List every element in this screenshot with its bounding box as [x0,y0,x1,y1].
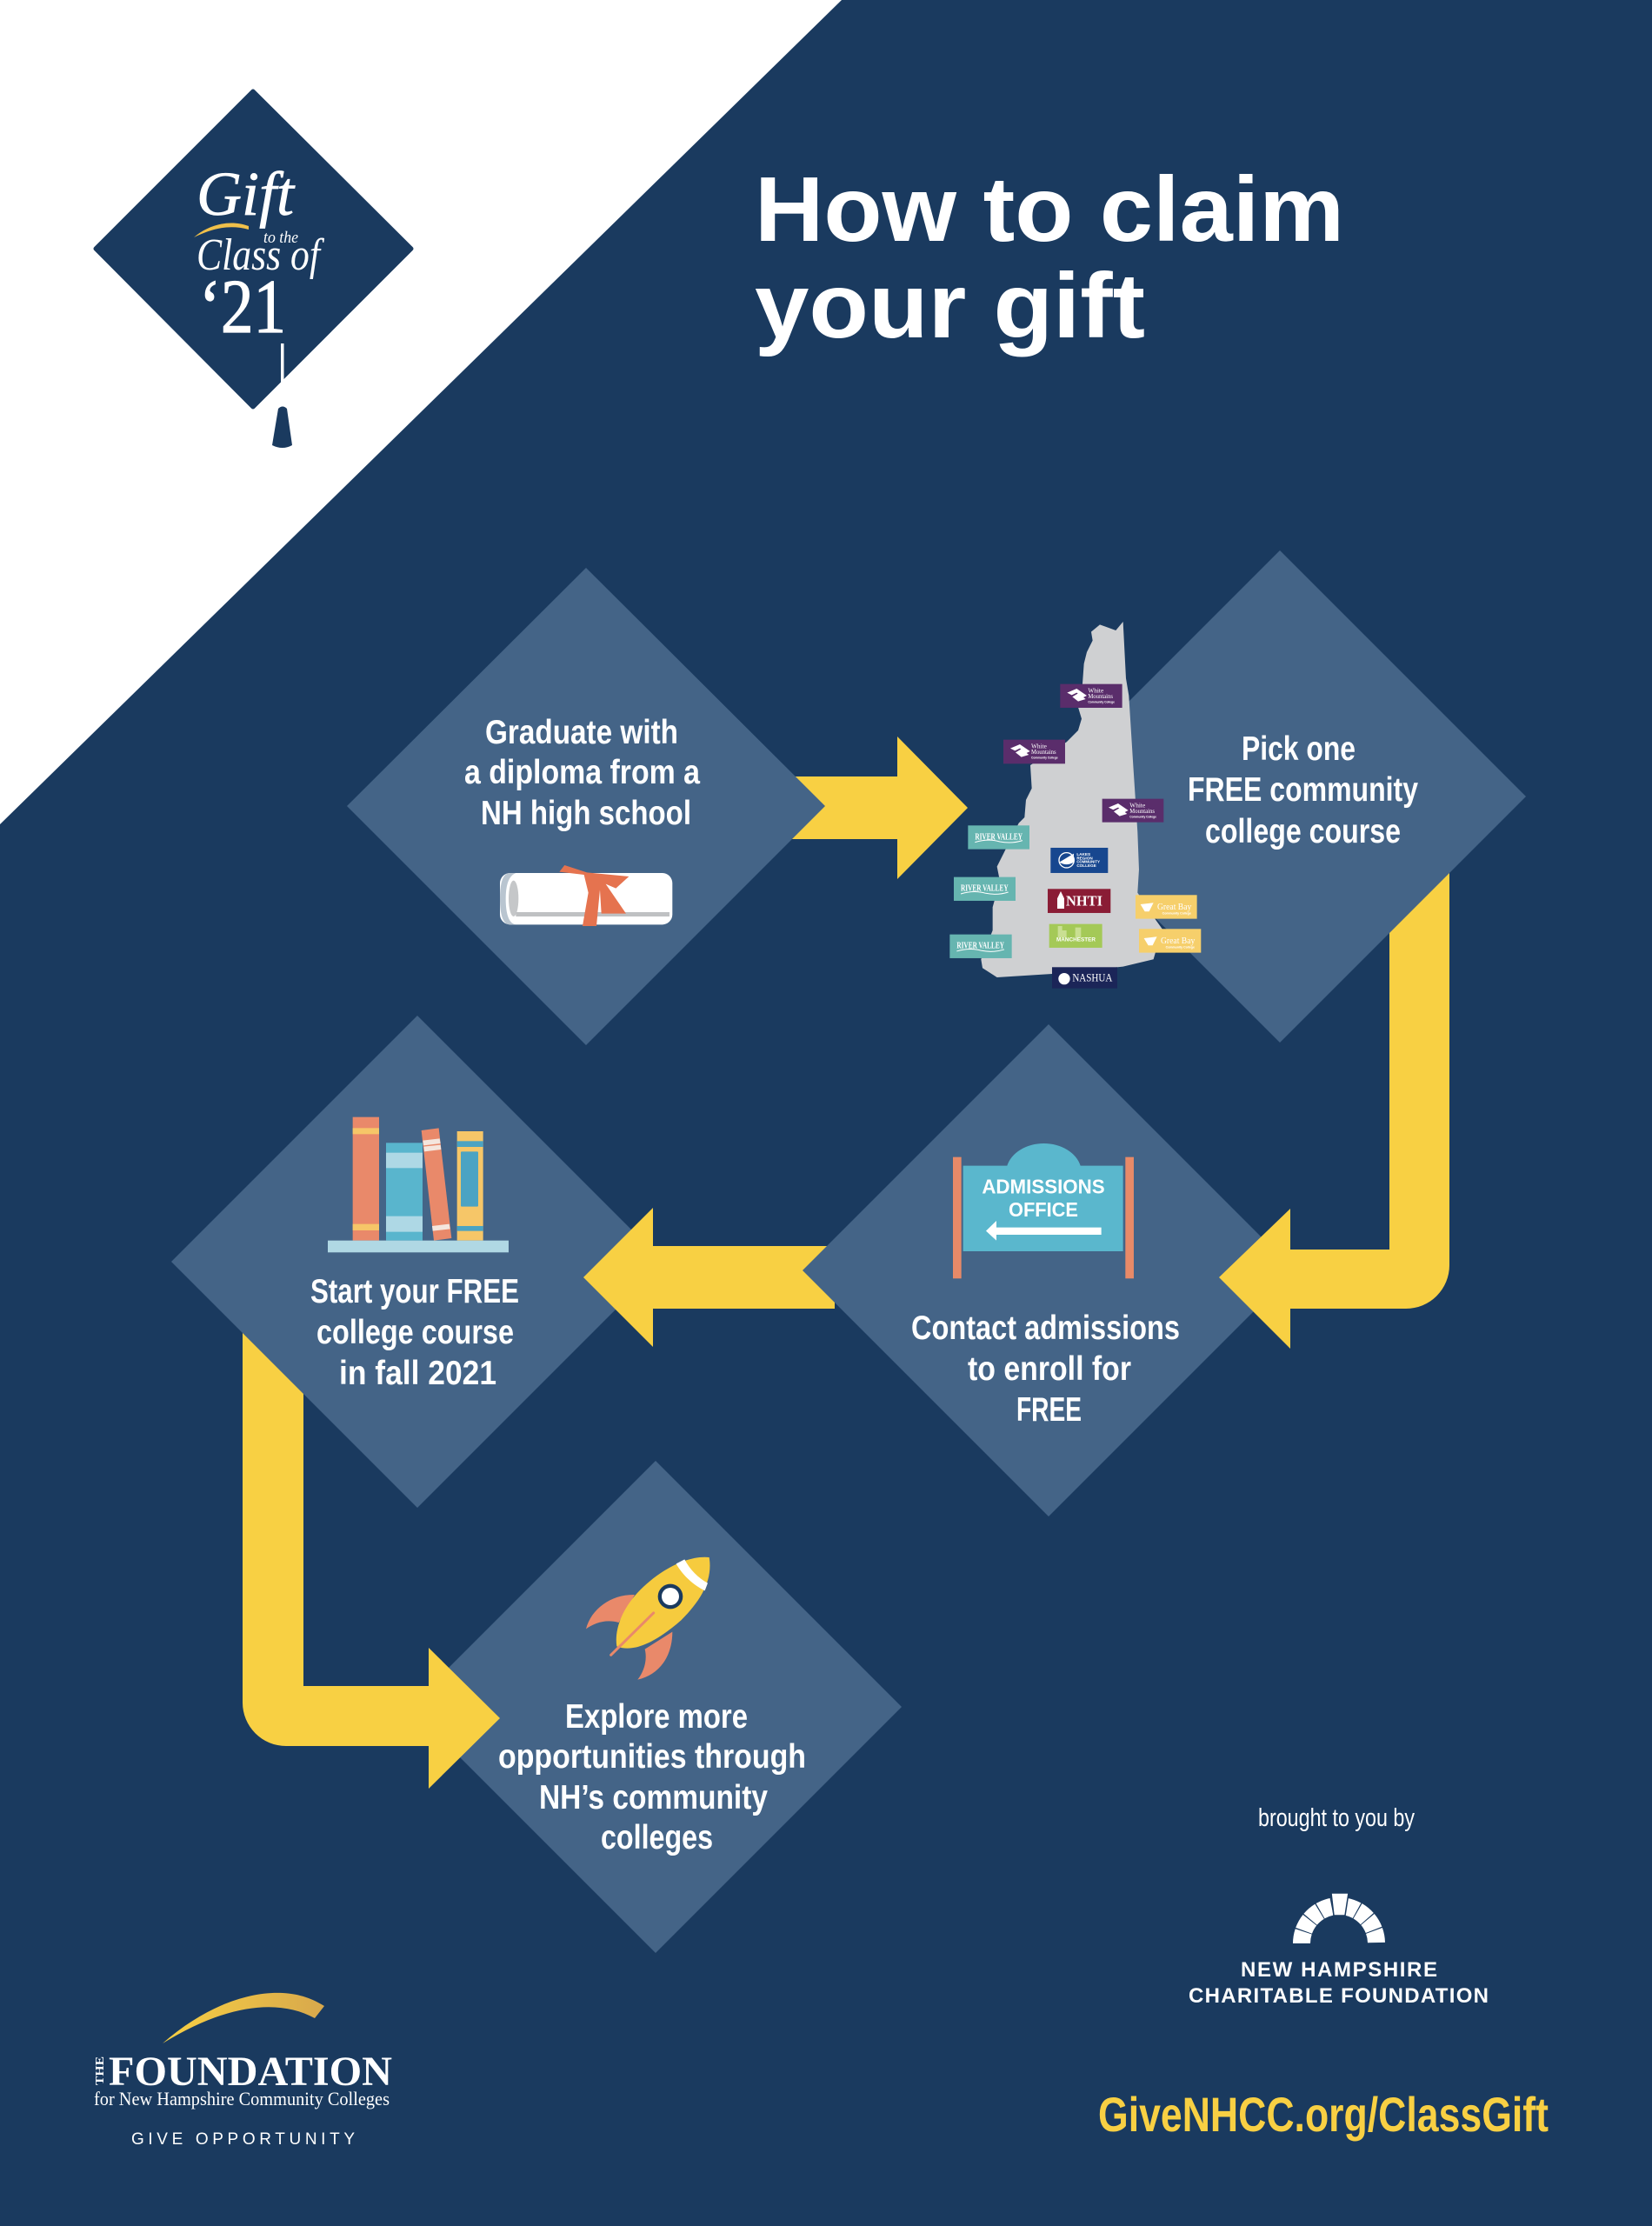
label: Nashua: NASHUA [1072,972,1113,984]
step 4 text: Start your FREE [310,1273,519,1310]
step 5 text: opportunities through [498,1738,806,1776]
label: Manchester [1049,924,1102,948]
logo: The Foundation for New Hampshire Community Colleges [94,1993,392,2149]
label: River Valley [949,935,1012,958]
step 1 text [464,714,700,832]
label: Great Bay: Great Bay [1161,936,1196,946]
label: Lakes Region: LAKES [1076,852,1090,856]
logo: Gift to the Class of '21 [96,91,411,448]
logo: The Foundation for New Hampshire Community Colleges: FOUNDATION [109,2049,392,2095]
label: River Valley [968,825,1029,850]
label: White Mountains [1003,740,1065,763]
icon: rocket [586,1557,709,1680]
white corner triangle [0,0,842,824]
logo: Gift to the Class of '21: ‘21 [199,265,286,350]
icon: admissions office sign: ADMISSIONS [982,1176,1105,1198]
map outline [981,622,1162,977]
label: White Mountains: Community College [1129,814,1157,818]
logo: The Foundation for New Hampshire Community Colleges: for New Hampshire Community Colleges [94,2088,390,2109]
label: White Mountains: Mountains [1088,692,1113,700]
step 5 text: NH’s community [539,1779,768,1816]
label: Great Bay: Community College [1166,944,1196,949]
label: River Valley: RIVER VALLEY [956,942,1004,951]
label: River Valley: RIVER VALLEY [961,884,1009,894]
step 4 text: college course [316,1314,514,1351]
title [755,158,1344,357]
label: Lakes Region: COLLEGE [1076,863,1096,868]
step 2 diamond: pick a course [1034,550,1526,1043]
step 1 text: a diploma from a [464,754,700,791]
step 2 text: FREE community [1188,771,1418,809]
logo: New Hampshire Charitable Foundation: NEW HAMPSHIRE [1241,1958,1437,1982]
step 3 diamond: contact admissions [803,1024,1295,1516]
label: White Mountains [1060,684,1122,708]
arrow: step 3 to step 4 [583,1208,835,1347]
step 1 text: NH high school [481,795,691,832]
logo: Gift to the Class of '21: Gift [197,159,296,229]
label: Great Bay: Community College [1162,910,1192,915]
icon: diploma [500,865,672,926]
label: River Valley: RIVER VALLEY [975,832,1023,842]
label: NHTI [1048,889,1110,913]
logo: New Hampshire Charitable Foundation: CHARITABLE FOUNDATION [1189,1984,1489,2008]
label: Great Bay [1139,929,1201,953]
step 1 diamond: graduate [347,568,825,1045]
label: Manchester: MANCHESTER [1056,936,1096,943]
label: White Mountains: Community College [1088,699,1116,703]
NH map with colleges [949,622,1201,989]
text: brought to you by: brought to you by [1258,1804,1415,1832]
label: White Mountains: Mountains [1031,748,1056,756]
step 3 text: FREE [1016,1391,1082,1429]
step 5 diamond: explore [410,1461,902,1953]
step 3 text [911,1310,1180,1429]
step 5 text: Explore more [565,1698,748,1736]
title: your gift [755,255,1145,357]
step 2 text: college course [1205,813,1401,850]
label: White Mountains: White [1129,802,1145,810]
icon: admissions office sign [953,1143,1134,1278]
logo: New Hampshire Charitable Foundation [1189,1893,1489,2008]
step 3 text: to enroll for [968,1350,1131,1388]
label: White Mountains: White [1031,743,1047,750]
logo: Gift to the Class of '21: to the [263,229,298,247]
arrow: step 1 to step 2 [783,736,968,879]
label: White Mountains [1102,799,1163,823]
label: White Mountains: Mountains [1129,807,1155,815]
label: NHTI: NHTI [1066,893,1102,910]
label: Nashua [1052,967,1117,989]
label: Great Bay [1136,895,1197,919]
logo: The Foundation for New Hampshire Community Colleges: THE [94,2056,107,2085]
label: Great Bay: Great Bay [1157,903,1192,912]
arrow: step 2 to step 3 [1219,873,1449,1349]
logo: The Foundation for New Hampshire Community Colleges: GIVE OPPORTUNITY [131,2130,355,2149]
label: Lakes Region [1050,848,1108,873]
label: River Valley [954,877,1016,901]
step 4 text [310,1273,519,1392]
label: White Mountains: Community College [1031,755,1058,759]
step 3 text: Contact admissions [911,1310,1180,1347]
title: How to claim [755,158,1344,261]
website URL: GiveNHCC.org/ClassGift [1098,2087,1549,2142]
step 4 diamond: start course [171,1016,663,1508]
step 5 text [498,1698,806,1856]
step 5 text: colleges [601,1819,713,1856]
step 2 text [1188,730,1418,850]
icon: admissions office sign: OFFICE [1009,1198,1078,1221]
arrow: step 4 to step 5 [243,1333,500,1789]
icon: books on a shelf [328,1117,509,1252]
label: Lakes Region: REGION [1076,856,1093,860]
label: Lakes Region: COMMUNITY [1076,860,1101,864]
logo: Gift to the Class of '21: Class of [197,230,324,280]
step 4 text: in fall 2021 [339,1355,496,1392]
step 2 text: Pick one [1242,730,1356,768]
step 1 text: Graduate with [485,714,678,751]
label: White Mountains: White [1088,687,1103,695]
